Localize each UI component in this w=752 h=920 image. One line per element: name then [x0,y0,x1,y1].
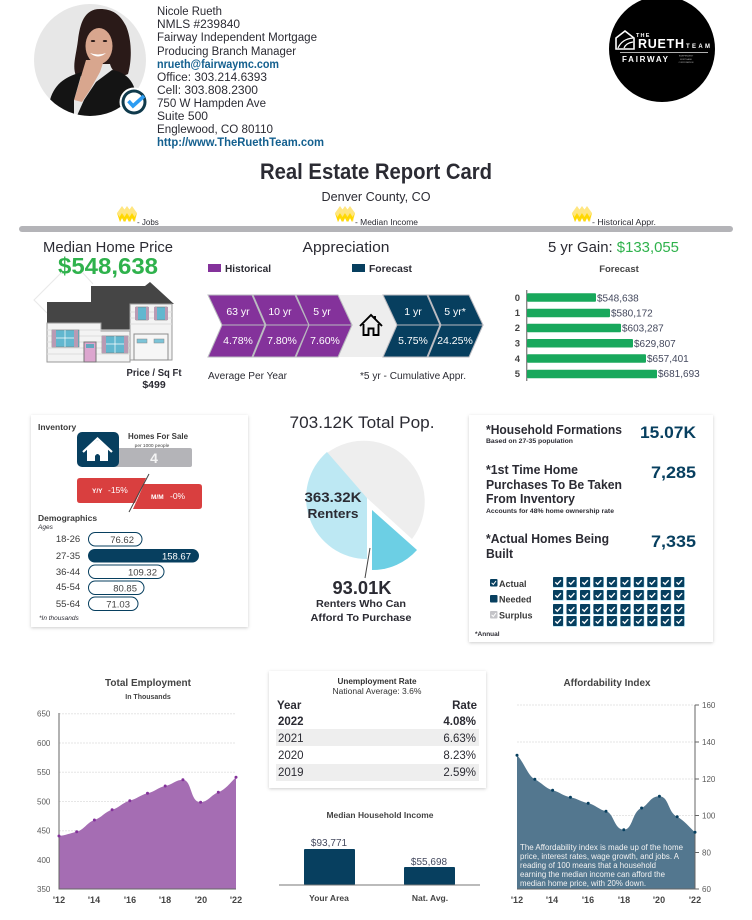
callout: renters who can afford to purchase: 93.01K [332,578,392,598]
bar chart: forecast: $681,693 [658,369,700,380]
year over year and month over month change: -0% [170,491,186,501]
heading: inventory: Inventory [38,422,77,432]
chevron labels: 24.25% [437,335,473,347]
age bars: 55-64 [56,599,80,610]
chart: total employment: 350 [37,885,51,894]
rating: median income: - Median Income [355,218,419,227]
age bars [56,532,199,610]
stat: actual homes being built [486,532,696,561]
heading: demographics [37,513,97,531]
rating: median income [335,206,419,227]
panel: unemployment rate table: National Average: 3.6% [332,687,422,696]
bar chart: forecast: Forecast [599,264,640,275]
chart: total employment: 450 [37,826,51,836]
price per square foot [126,368,182,391]
stat: actual homes being built: 7,335 [651,532,696,551]
heading: appreciation: Appreciation [302,239,390,256]
chart: affordability index: '20 [653,895,665,905]
stat: first time home purchases: Purchases To Be Taken [486,478,622,492]
median price value: $548,638 [58,253,158,279]
chevron labels [223,306,473,347]
contact details: nrueth@fairwaymc.com [157,59,279,71]
chart: total employment: '20 [195,895,207,905]
logo: The Rueth Team Fairway: THE [636,33,651,39]
panel: unemployment rate table: 2019 [278,767,304,779]
footnote: annual: *Annual [475,631,500,638]
chart: total employment: Total Employment [105,678,192,689]
ratings row [19,206,733,232]
logo: The Rueth Team Fairway: CORPORATION [679,61,694,64]
icon: house illustration [34,272,174,362]
contact details: Suite 500 [157,111,208,123]
chart: affordability index: 100 [702,812,716,820]
stat: actual homes being built: *Actual Homes Being [486,532,609,546]
stat: first time home purchases: *1st Time Home [486,463,578,477]
stat: first time home purchases: Accounts for 48% home ownership rate [486,508,614,515]
heading: demographics: Demographics [38,513,97,523]
callout: renters who can afford to purchase: Renters Who Can [316,599,406,610]
contact details: Nicole Rueth [157,6,222,18]
chart: total employment: In Thousands [125,694,171,701]
bar chart: forecast: $629,807 [634,339,676,350]
rating: historical appreciation [572,206,656,227]
panel: unemployment rate table: 6.63% [443,733,476,745]
chart: affordability index: 60 [702,885,711,894]
year over year and month over month change: M/M [151,494,164,501]
chart: total employment: 600 [37,739,51,748]
panel: unemployment rate table: Unemployment Rate [338,677,417,686]
chart: total employment: '14 [88,895,100,905]
contact details: Office: 303.214.6393 [157,72,267,84]
chart: affordability index: 80 [702,848,711,858]
bar chart: forecast: 0 [515,293,520,304]
chevron chart: appreciation [208,295,483,357]
panel: inventory and demographics [31,415,248,627]
age bars: 18-26 [56,534,80,545]
chart: median household income: Nat. Avg. [412,893,448,903]
affordability note: median home price, with 20% down. [520,879,646,888]
panel: housing supply [469,415,713,642]
panel: unemployment rate table: 2021 [278,733,304,745]
affordability note [520,843,684,888]
callout: renters who can afford to purchase [310,578,412,624]
panel: unemployment rate table: 4.08% [443,716,476,728]
bar chart: forecast: $603,287 [622,324,664,334]
year over year and month over month change: -15% [108,485,128,495]
chart: affordability index: '22 [689,895,701,905]
bar chart: forecast: 5 [515,369,521,380]
legend: homes status: Surplus [499,610,533,620]
heading: total population: 703.12K Total Pop. [290,413,434,432]
chart: affordability index: '16 [582,895,594,905]
stat: household formations [486,423,697,445]
heading: median home price: Median Home Price [43,239,173,256]
logo: The Rueth Team Fairway [609,0,715,102]
contact details: Producing Branch Manager [157,46,296,58]
age bars: 27-35 [56,551,80,562]
bar chart: forecast: 3 [515,338,520,350]
bar chart: forecast: $580,172 [611,308,653,320]
panel: unemployment rate table: 8.23% [443,750,476,762]
bar chart: forecast: $657,401 [647,354,689,365]
panel: unemployment rate table: 2.59% [443,767,476,779]
chart: affordability index: Affordability Index [564,678,651,689]
label: renters [304,490,362,521]
age bars: 76.62 [110,535,134,546]
subtitle: location: Denver County, CO [322,189,430,204]
logo: The Rueth Team Fairway: INDEPENDENT [679,56,694,58]
age bars: 158.67 [162,552,191,562]
stat: actual homes being built: Built [486,547,514,561]
age bars: 80.85 [113,584,137,594]
chart: total employment [37,678,242,905]
legend: homes status [490,579,533,620]
affordability note: The Affordability index is made up of the home [520,843,684,852]
heading: five year gain: 5 yr Gain: $133,055 [548,239,679,256]
chart: total employment: '22 [230,895,242,905]
chevron labels: 63 yr [226,306,250,318]
chart: affordability index: '18 [618,895,630,905]
appreciation footnotes [208,371,466,382]
chevron labels: 7.60% [310,335,340,347]
contact details: NMLS #239840 [157,19,240,31]
rating: historical appreciation: - Historical Appr. [592,218,656,227]
bar chart: forecast: 4 [515,354,521,365]
chart: median household income: $55,698 [411,857,448,868]
chevron labels: 7.80% [267,335,297,347]
chart: affordability index: 160 [702,701,716,710]
contact details: Cell: 303.808.2300 [157,85,258,97]
legend: appreciation: Forecast [369,264,413,275]
stat: household formations: Based on 27-35 population [486,438,573,445]
contact details [157,6,324,149]
chart: total employment: 400 [37,856,51,865]
chart: total employment: 500 [37,798,51,806]
affordability note: price, interest rates, wage growth, and jobs. A [520,852,680,861]
icon: verified badge [120,88,148,116]
age bars: 109.32 [128,568,157,578]
homes for sale gauge: Homes For Sale [128,431,188,441]
logo: The Rueth Team Fairway: MORTGAGE [680,58,692,61]
callout: renters who can afford to purchase: Afford To Purchase [310,613,412,624]
icon: home outline [360,315,382,335]
bar chart: forecast: $548,638 [597,294,639,304]
price per square foot: Price / Sq Ft [126,368,182,379]
pie chart: renters [304,441,425,578]
affordability note: earning the median income can afford the [520,870,666,879]
bar chart: forecast: 1 [515,308,521,319]
bar chart: forecast: 2 [515,323,520,334]
chart: affordability index [511,678,716,905]
panel: unemployment rate table: Year [277,700,302,712]
chart: affordability index: 140 [702,738,716,747]
chart: median household income: Your Area [309,893,349,903]
age bars: 36-44 [56,567,80,578]
title: Real Estate Report Card [260,159,492,184]
homes for sale gauge [77,431,192,467]
legend: appreciation: Historical [225,264,271,275]
label: renters: Renters [308,506,358,521]
chevron labels: 1 yr [404,306,422,318]
chart: affordability index: 120 [702,775,716,784]
chevron labels: 10 yr [268,306,292,318]
legend: homes status: Needed [499,594,532,604]
chart: median household income [279,810,480,903]
age bars: 45-54 [56,582,80,593]
year over year and month over month change [77,474,202,512]
contact details: Fairway Independent Mortgage [157,32,317,44]
bar chart: forecast [515,264,700,381]
stat: household formations: *Household Formations [486,423,622,437]
panel: unemployment rate table [269,671,486,788]
stat: first time home purchases: 7,285 [651,463,696,482]
chart: affordability index: '14 [546,895,558,905]
label: renters: 363.32K [304,490,362,505]
contact details: 750 W Hampden Ave [157,98,266,110]
homes for sale gauge: 4 [150,450,158,466]
appreciation footnotes: Average Per Year [208,371,288,382]
price per square foot: $499 [142,379,166,391]
panel: unemployment rate table: 2022 [278,716,304,728]
contact photo [34,4,146,120]
heading: demographics: Ages [37,524,54,531]
rating: jobs [117,206,159,227]
chart: median household income: Median Household Income [326,810,434,820]
age bars: 71.03 [106,600,130,610]
stat: first time home purchases [486,463,696,515]
stat: household formations: 15.07K [640,423,697,442]
panel: unemployment rate table: 2020 [278,750,304,762]
chart: median household income: $93,771 [311,838,348,849]
chart: total employment: '18 [159,895,171,905]
logo: The Rueth Team Fairway: RUETH [638,37,684,51]
chart: total employment: '12 [53,895,65,905]
chevron labels: 5 yr [313,306,331,318]
contact details: http://www.TheRuethTeam.com [157,137,324,149]
panel: unemployment rate table: Rate [452,700,477,712]
chevron labels: 5 yr* [444,306,466,318]
affordability note: reading of 100 means that a household [520,861,656,870]
chevron labels: 5.75% [398,335,428,347]
rating: jobs: - Jobs [137,218,159,227]
appreciation footnotes: *5 yr - Cumulative Appr. [360,371,466,382]
chart: total employment: 650 [37,710,51,718]
logo: The Rueth Team Fairway: TEAM [686,44,710,50]
chevron labels: 4.78% [223,335,253,347]
stat: first time home purchases: From Inventory [486,492,575,506]
chart: affordability index: '12 [511,895,523,905]
year over year and month over month change: Y/Y [92,488,103,495]
chart: total employment: '16 [124,895,136,905]
legend: appreciation [208,264,413,275]
footnote: in thousands: *In thousands [39,615,80,622]
pictogram grid: homes [553,577,685,626]
chart: total employment: 550 [37,768,51,777]
logo: The Rueth Team Fairway: FAIRWAY [622,55,669,64]
homes for sale gauge: per 1000 people [135,443,170,449]
legend: homes status: Actual [499,579,527,589]
contact details: Englewood, CO 80110 [157,124,273,136]
